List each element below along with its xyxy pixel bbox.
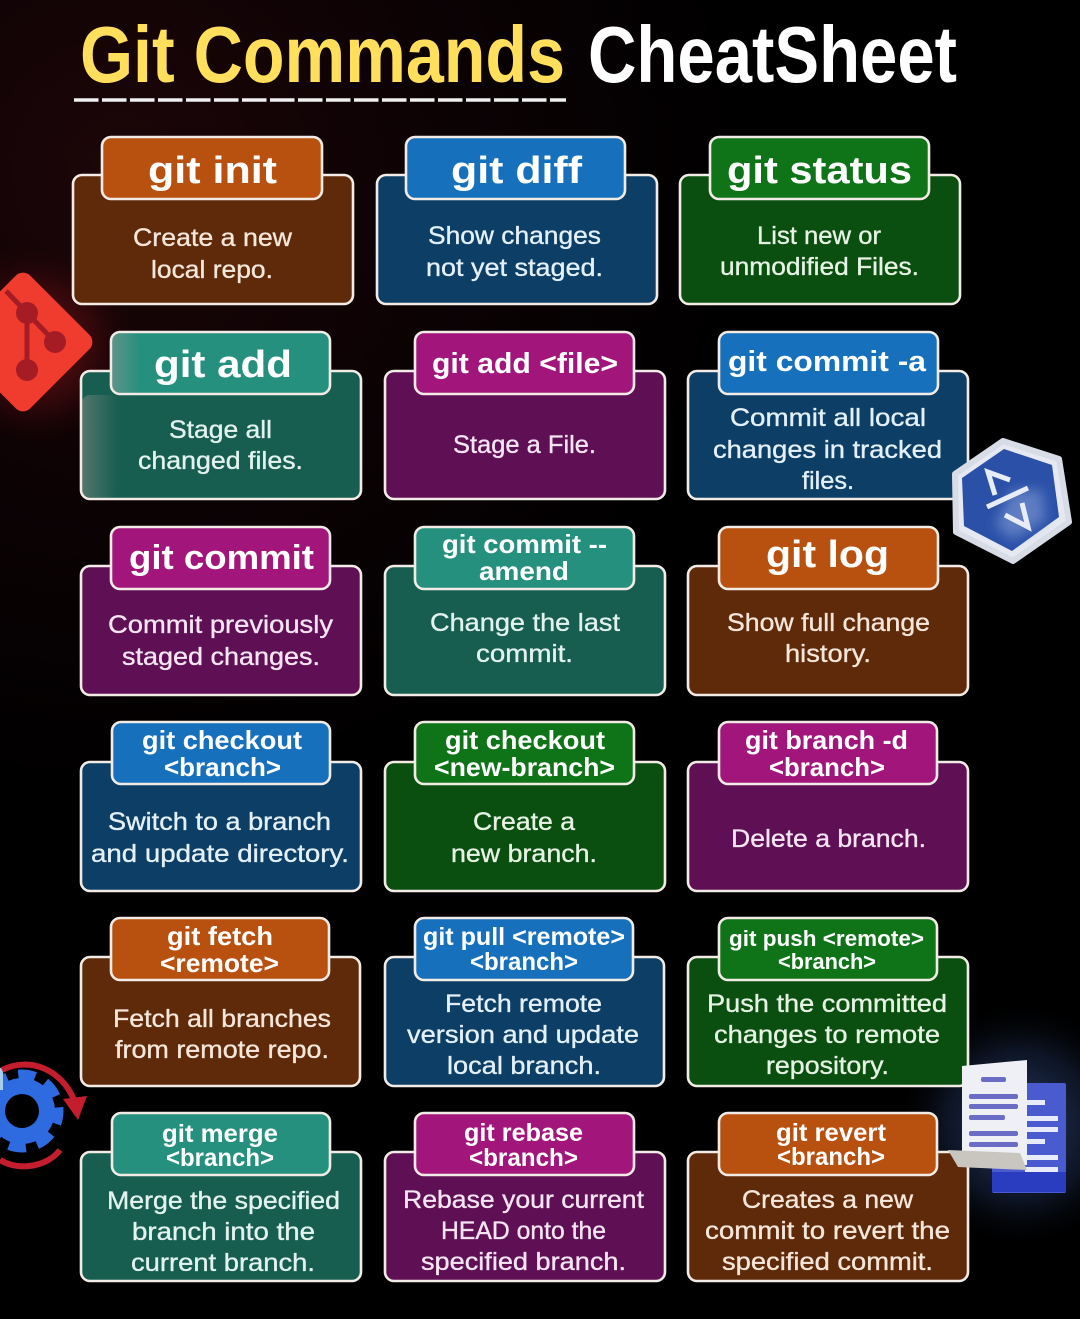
- tab: git push: git push <remote>: [729, 926, 924, 951]
- tab: git fetch: [111, 918, 329, 980]
- description: HEAD onto the: [441, 1217, 606, 1245]
- tab: git commit: [111, 527, 330, 589]
- title: Git Commands: [80, 10, 565, 99]
- tab: git push: [719, 918, 937, 980]
- description: [430, 609, 620, 668]
- card: git diff: [377, 137, 657, 304]
- description: version and update: [407, 1021, 639, 1049]
- description: [713, 404, 942, 495]
- tab: git checkout branch: <branch>: [164, 752, 281, 782]
- tab: git add: [111, 332, 330, 394]
- description: [108, 611, 334, 671]
- description: Create a: [473, 808, 575, 836]
- tab: git init: git init: [148, 150, 277, 192]
- description: Creates a new: [742, 1186, 914, 1214]
- description: Change the last: [430, 609, 620, 637]
- card: git commit: [81, 527, 361, 695]
- card: git fetch: [81, 918, 360, 1086]
- card: git revert: [688, 1113, 968, 1281]
- description: branch into the: [132, 1218, 315, 1246]
- tab: git diff: [406, 137, 625, 199]
- tab: git log: git log: [766, 534, 889, 576]
- description: repository.: [766, 1052, 889, 1080]
- tab: git revert: git revert: [776, 1119, 887, 1147]
- card: git checkout branch: [81, 722, 361, 891]
- description: Create a new: [133, 224, 293, 252]
- tab: git fetch: git fetch: [167, 921, 273, 951]
- card: git log: [688, 527, 968, 695]
- description: [451, 808, 597, 868]
- tab: git commit: git commit: [129, 539, 314, 577]
- card: git add: [81, 332, 361, 499]
- tab: git status: git status: [727, 150, 912, 192]
- tab: git commit amend: amend: [479, 556, 569, 586]
- card: git branch -d: [688, 722, 968, 891]
- tab: git revert: <branch>: [777, 1143, 885, 1171]
- description: [113, 1005, 331, 1064]
- tab: git commit -a: git commit -a: [728, 346, 927, 378]
- title: [80, 10, 957, 99]
- description: Stage all: [169, 416, 272, 444]
- tab: git commit -a: [719, 332, 938, 394]
- card: git checkout new-branch: [385, 722, 665, 891]
- description: Show changes: [428, 222, 601, 250]
- tab: git log: [719, 527, 938, 589]
- card: git push: [688, 918, 968, 1086]
- tab: git merge: [112, 1113, 330, 1175]
- tab: git pull: <branch>: [470, 948, 578, 976]
- tab: git add file: [415, 332, 634, 394]
- description: [426, 222, 603, 282]
- description: changes in tracked: [713, 436, 942, 464]
- description: [727, 609, 930, 668]
- tab: git merge: git merge: [162, 1120, 278, 1148]
- description: not yet staged.: [426, 254, 603, 282]
- tab: git rebase: [415, 1113, 634, 1175]
- tab: git branch -d: git branch -d: [745, 725, 908, 755]
- tab: git add: git add: [154, 344, 292, 386]
- tab: git init: [102, 137, 322, 199]
- description: [707, 990, 947, 1080]
- back page: [992, 1083, 1066, 1193]
- tab: git pull: git pull <remote>: [423, 923, 625, 951]
- card: git rebase: [385, 1113, 665, 1281]
- icon: gear with arrows: [0, 1065, 87, 1166]
- tab: git checkout new-branch: [415, 722, 634, 784]
- description: Stage a File.: [453, 431, 596, 459]
- card: git pull: [385, 918, 664, 1086]
- tab: git checkout new-branch: <new-branch>: [434, 752, 615, 782]
- description: specified commit.: [722, 1248, 933, 1276]
- tab: git fetch: <remote>: [160, 948, 279, 978]
- tab: git rebase: <branch>: [469, 1144, 578, 1172]
- description: [403, 1186, 644, 1276]
- card: git commit amend: [385, 527, 665, 695]
- description: local branch.: [447, 1052, 601, 1080]
- card: git commit -a: [688, 332, 968, 499]
- tab: git commit amend: git commit --: [442, 529, 607, 559]
- description: Delete a branch.: [731, 825, 926, 853]
- front page: [948, 1060, 1027, 1170]
- tab: git merge: <branch>: [166, 1144, 274, 1172]
- tab: git branch -d: [719, 722, 937, 784]
- description: local repo.: [151, 256, 273, 284]
- description: Commit all local: [730, 404, 926, 432]
- description: commit to revert the: [705, 1217, 950, 1245]
- tab: git pull: [415, 918, 633, 980]
- card: git merge: [81, 1113, 361, 1281]
- description: history.: [785, 640, 871, 668]
- description: changes to remote: [714, 1021, 940, 1049]
- description: [705, 1186, 950, 1276]
- description: Rebase your current: [403, 1186, 644, 1214]
- description: staged changes.: [122, 643, 320, 671]
- dashed title underline: [74, 98, 566, 102]
- icon: documents: [948, 1060, 1066, 1193]
- description: Fetch remote: [445, 990, 602, 1018]
- card: git add file: [385, 332, 665, 499]
- description: Switch to a branch: [108, 808, 331, 836]
- description: [407, 990, 639, 1080]
- icon: git logo: [0, 268, 97, 416]
- description: Merge the specified: [107, 1187, 340, 1215]
- description: [720, 222, 919, 281]
- description: current branch.: [131, 1249, 315, 1277]
- description: List new or: [757, 222, 881, 250]
- tab: git diff: git diff: [451, 150, 582, 192]
- icon: code badge: [955, 441, 1069, 561]
- description: [107, 1187, 340, 1277]
- tab: git add file: git add <file>: [432, 348, 618, 380]
- description: specified branch.: [421, 1248, 626, 1276]
- tab: git push: <branch>: [778, 949, 876, 974]
- description: Push the committed: [707, 990, 947, 1018]
- description: commit.: [476, 640, 573, 668]
- description: and update directory.: [91, 840, 349, 868]
- tab: git commit amend: [415, 527, 634, 589]
- description: Commit previously: [108, 611, 334, 639]
- description: Fetch all branches: [113, 1005, 331, 1033]
- tab: git checkout branch: [112, 722, 330, 784]
- description: [133, 224, 293, 284]
- description: Show full change: [727, 609, 930, 637]
- tab: git revert: [719, 1113, 937, 1175]
- description: unmodified Files.: [720, 253, 919, 281]
- description: [138, 416, 303, 475]
- tab: git branch -d: <branch>: [769, 752, 885, 782]
- description: files.: [802, 467, 854, 495]
- tab: git checkout branch: git checkout: [142, 725, 302, 755]
- card: git status: [680, 137, 960, 304]
- tab: git status: [710, 137, 929, 199]
- description: new branch.: [451, 840, 597, 868]
- description: from remote repo.: [115, 1036, 329, 1064]
- tab: git checkout new-branch: git checkout: [445, 725, 605, 755]
- description: changed files.: [138, 447, 303, 475]
- tab: git rebase: git rebase: [464, 1119, 583, 1147]
- description: [91, 808, 349, 868]
- card: git init: [73, 137, 353, 304]
- title: CheatSheet: [588, 10, 957, 99]
